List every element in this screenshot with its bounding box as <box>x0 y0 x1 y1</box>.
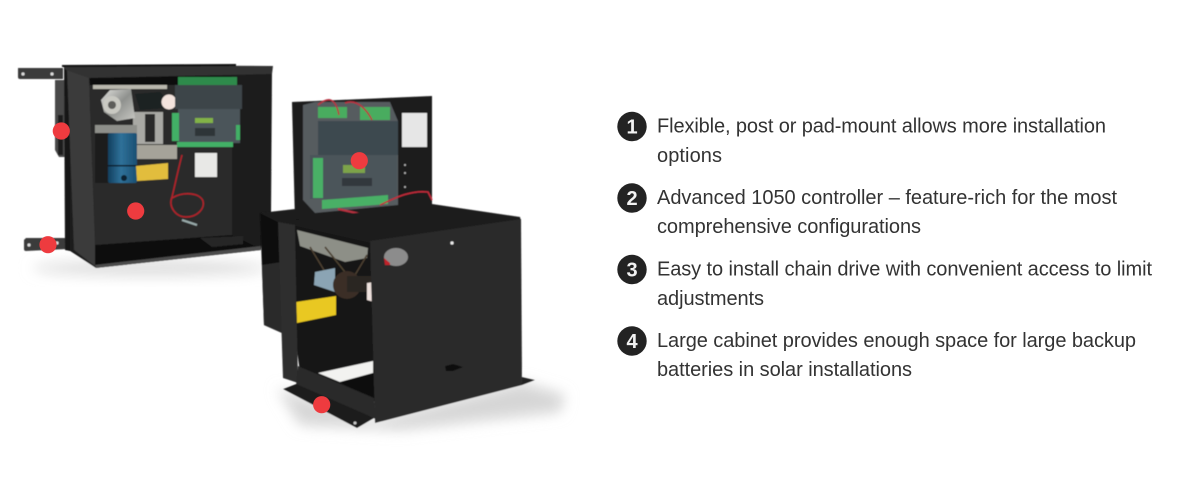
white label <box>402 113 427 147</box>
top mounting bracket <box>18 68 63 79</box>
text 2: comprehensive configurations <box>657 216 921 238</box>
cabinet shadow <box>32 260 268 276</box>
controller board <box>172 77 242 147</box>
text 4 <box>657 330 1136 381</box>
feature 3 <box>617 255 1152 310</box>
cabinet shadow <box>277 382 565 430</box>
feature 4 <box>617 326 1136 381</box>
gear motor <box>93 85 176 183</box>
latch <box>445 364 463 371</box>
text 3: adjustments <box>657 288 764 310</box>
badge 2 <box>617 183 647 213</box>
text 4: batteries in solar installations <box>657 359 912 381</box>
text 3: Easy to install chain drive with convenient access to limit <box>657 258 1152 280</box>
bottom mounting bracket <box>24 238 68 251</box>
front post <box>278 222 298 383</box>
text 3 <box>657 258 1152 310</box>
interior with drive <box>278 215 376 402</box>
badge 4 <box>617 326 647 356</box>
badge 1: 1 <box>626 116 638 138</box>
cabinet top <box>260 204 521 243</box>
chain access opening <box>384 248 408 266</box>
callout dot: bracket top <box>53 122 70 140</box>
feature 2 <box>617 183 1117 238</box>
photo: pad-mount operator with chain drive <box>260 96 565 430</box>
callout dot: base flange <box>313 396 330 413</box>
callout dot: controller <box>351 152 368 169</box>
text 2: Advanced 1050 controller – feature-rich for the most <box>657 187 1117 209</box>
text 2 <box>657 187 1117 238</box>
text 1: options <box>657 145 722 167</box>
controller board <box>303 100 432 216</box>
feature 1 <box>617 112 1106 167</box>
badge 4: 4 <box>626 331 638 353</box>
text 1: Flexible, post or pad-mount allows more installation <box>657 116 1106 138</box>
callout dot: bracket bottom <box>39 236 57 253</box>
upright controller panel <box>292 96 432 222</box>
photo: open wall-mount cabinet <box>18 64 273 276</box>
badge 1 <box>617 112 647 141</box>
badge 2: 2 <box>626 188 638 210</box>
text 1 <box>657 116 1106 167</box>
white wiring label <box>195 153 217 177</box>
text 4: Large cabinet provides enough space for large backup <box>657 330 1136 352</box>
yellow label and wiring <box>136 145 203 225</box>
cabinet body <box>55 64 273 268</box>
callout dot: cabinet back <box>127 202 144 220</box>
front right panel <box>370 219 522 423</box>
bottom opening and flange <box>283 361 535 428</box>
badge 3 <box>617 255 647 284</box>
chain drive <box>297 230 374 302</box>
rear box <box>260 212 282 333</box>
badge 3: 3 <box>626 260 638 282</box>
yellow warning label <box>296 296 336 323</box>
